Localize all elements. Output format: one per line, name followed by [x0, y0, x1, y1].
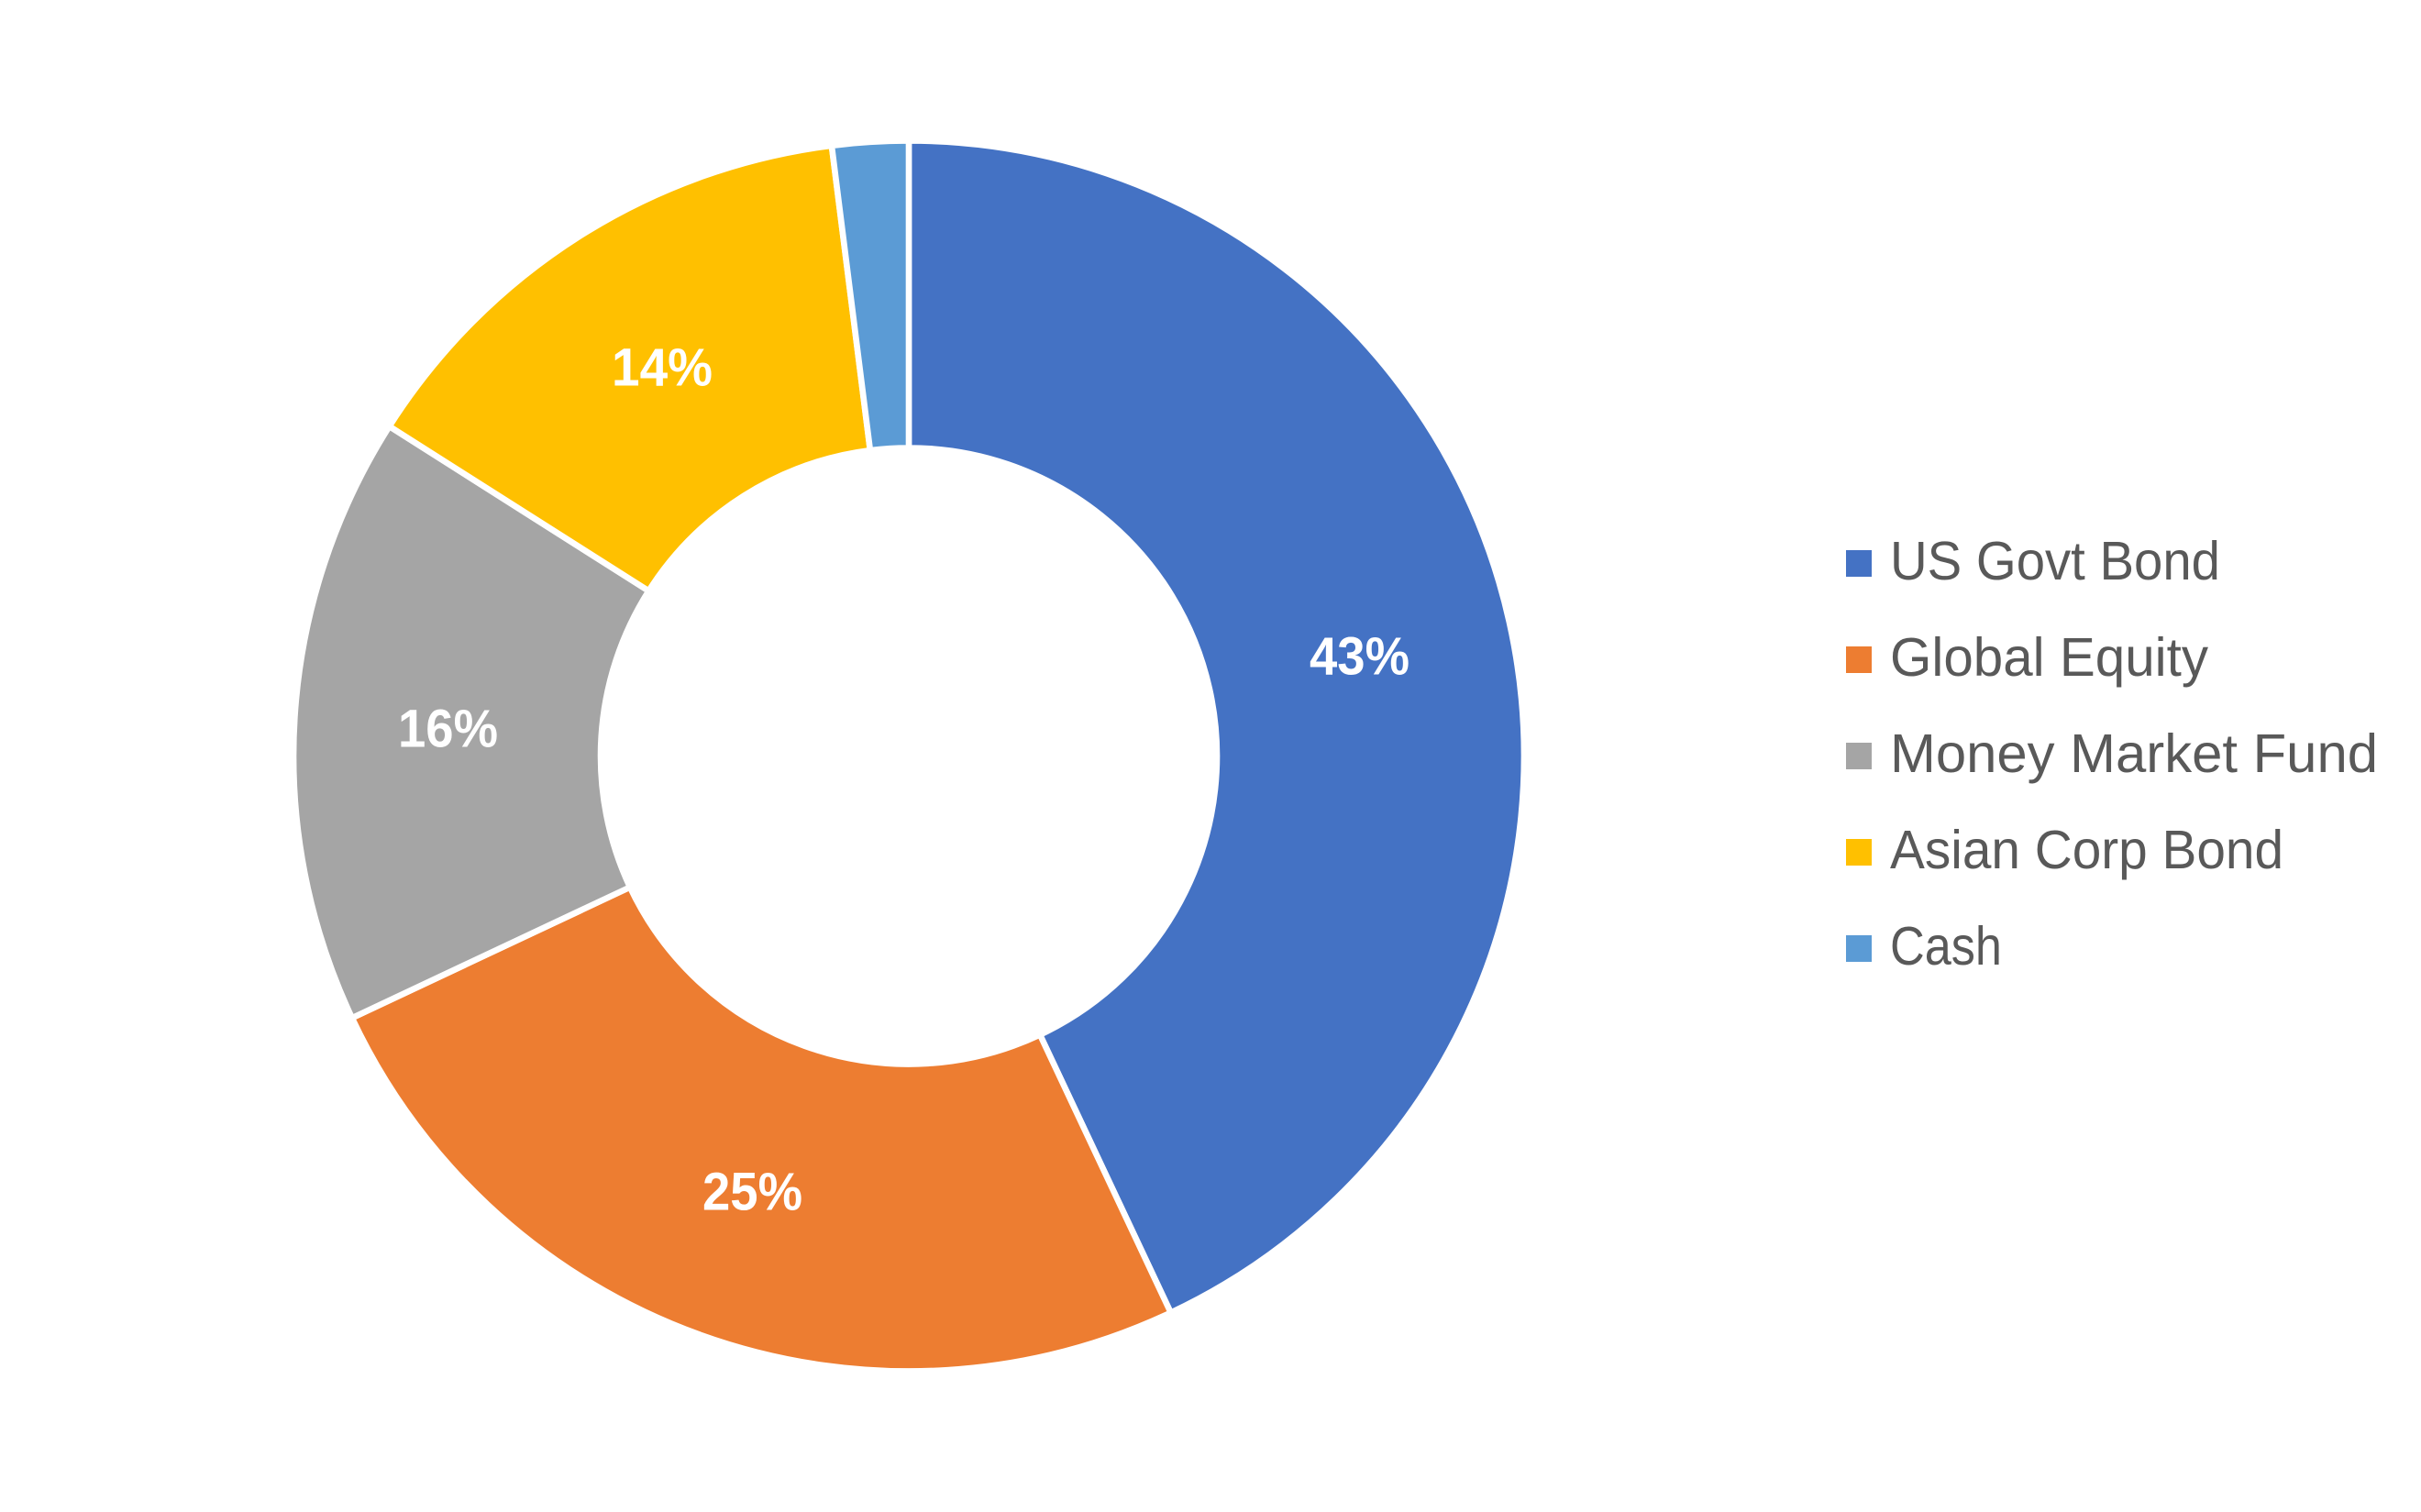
slice: US Govt Bond 43% — [909, 141, 1524, 1313]
slice: Asian Corp Bond 14% — [390, 146, 870, 590]
label: 14%: 14% — [612, 337, 713, 398]
legend item: Money Market Fund: Money Market Fund — [1890, 723, 2378, 784]
legend item: Asian Corp Bond: Asian Corp Bond — [1890, 820, 2283, 880]
donut chart — [293, 141, 1524, 1371]
label: 25%: 25% — [702, 1163, 802, 1221]
legend item: Global Equity: Global Equity — [1890, 627, 2208, 688]
legend item: Cash — [1846, 916, 2002, 977]
legend item: US Govt Bond: US Govt Bond — [1890, 531, 2220, 591]
legend — [1846, 531, 2378, 977]
slice: Cash 2% — [832, 141, 909, 450]
label: 43%: 43% — [1310, 627, 1409, 686]
slice: Money Market Fund 16% — [293, 426, 648, 1018]
legend item: Cash: Cash — [1890, 916, 2002, 977]
data labels — [398, 337, 1409, 1221]
label: 16%: 16% — [398, 699, 498, 759]
slice: Global Equity 25% — [352, 888, 1171, 1371]
